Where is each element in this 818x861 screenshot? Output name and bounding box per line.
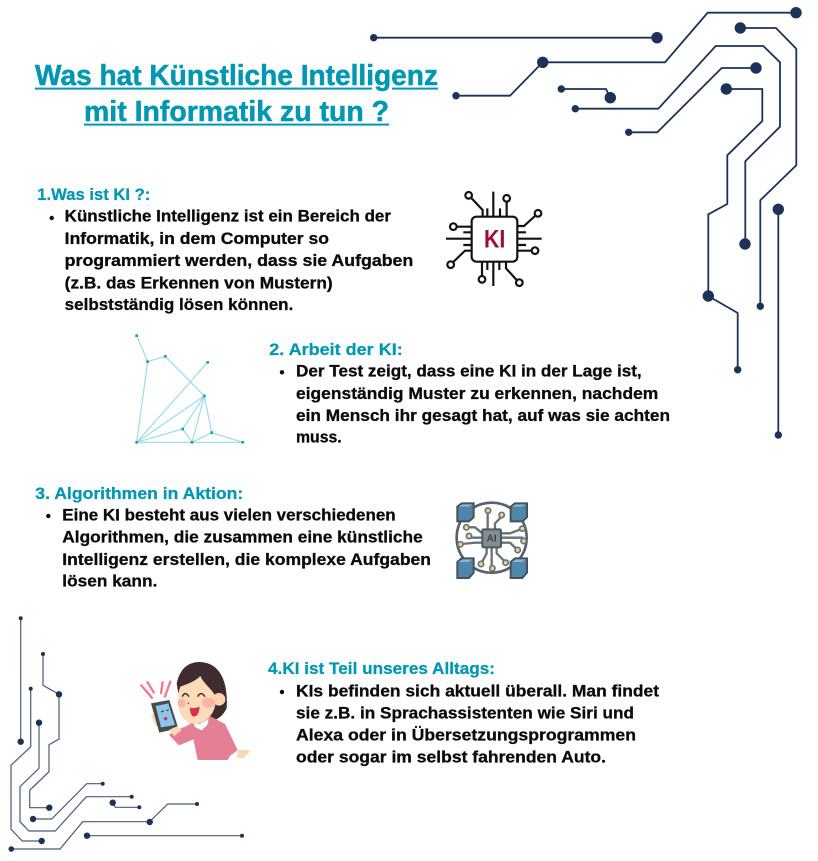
text block 2: eigenständig Muster zu erkennen, nachdem <box>296 385 658 403</box>
section 3: Algorithmen in Aktion <box>35 485 431 591</box>
decorative circuit: top right <box>370 7 802 439</box>
text block 3: Eine KI besteht aus vielen verschiedenen <box>62 507 396 525</box>
text block 1: Künstliche Intelligenz ist ein Bereich der <box>65 208 392 226</box>
text block 1: selbstständig lösen können. <box>65 296 293 314</box>
text block 3: Intelligenz erstellen, die komplexe Aufgaben <box>62 551 431 569</box>
text block 3 <box>46 507 431 591</box>
text block 3: lösen kann. <box>62 573 157 591</box>
text block 2: Der Test zeigt, dass eine KI in der Lage ist, <box>296 363 642 381</box>
icon: AI chip with cubes: AI <box>487 534 497 545</box>
text block 4: Alexa oder in Übersetzungsprogrammen <box>296 726 636 744</box>
text block 1: Informatik, in dem Computer so <box>65 230 329 248</box>
title: mit Informatik zu tun ? <box>84 96 389 128</box>
heading 4: 4.KI ist Teil unseres Alltags: <box>268 660 495 678</box>
text block 4: sie z.B. in Sprachassistenten wie Siri und <box>296 704 634 722</box>
title <box>35 60 438 128</box>
icon: AI chip with cubes <box>457 503 527 578</box>
heading 1: 1.Was ist KI ?: <box>37 186 150 204</box>
icon: KI chip: KI <box>484 226 505 254</box>
text block 2: muss. <box>296 429 342 447</box>
text block 3: Algorithmen, die zusammen eine künstliche <box>62 529 423 547</box>
title: Was hat Künstliche Intelligenz <box>35 60 438 92</box>
text block 1: programmiert werden, dass sie Aufgaben <box>65 252 413 270</box>
decorative circuit: bottom left <box>8 616 244 852</box>
text block 4 <box>280 682 660 766</box>
text block 2 <box>280 363 670 447</box>
text block 4: KIs befinden sich aktuell überall. Man findet <box>296 682 660 700</box>
icon: KI chip <box>446 192 542 286</box>
text block 2: ein Mensch ihr gesagt hat, auf was sie achten <box>296 407 670 425</box>
heading 2: 2. Arbeit der KI: <box>269 341 403 359</box>
section 2: Arbeit der KI <box>269 341 670 447</box>
text block 1 <box>50 208 413 314</box>
icon: woman with smartphone <box>141 662 251 760</box>
text block 1: (z.B. das Erkennen von Mustern) <box>65 274 333 292</box>
section 1: Was ist KI <box>37 186 413 314</box>
icon: network graph <box>135 334 244 444</box>
text block 4: oder sogar im selbst fahrenden Auto. <box>296 748 606 766</box>
heading 3: 3. Algorithmen in Aktion: <box>35 485 243 503</box>
section 4: KI ist Teil unseres Alltags <box>268 660 660 766</box>
